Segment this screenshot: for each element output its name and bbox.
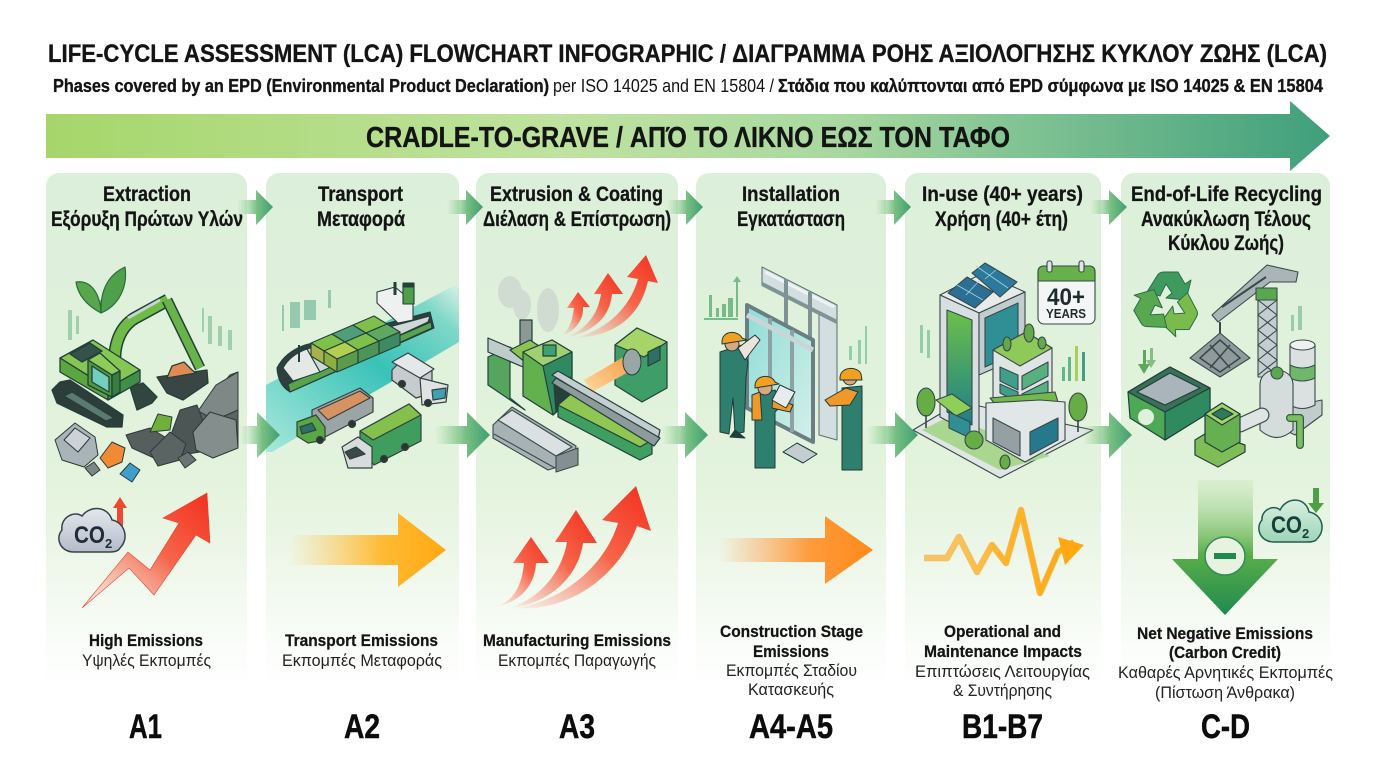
chart: A3 manufacturing emissions arrows — [498, 486, 651, 608]
lower flow arrow 5 — [1083, 412, 1132, 458]
cargo ship — [277, 282, 434, 392]
conveyor — [552, 371, 660, 460]
heading: transport: Μεταφορά — [317, 208, 405, 231]
storage cylinder — [1275, 340, 1322, 435]
label: A4-A5 emissions: Construction Stage — [720, 622, 863, 641]
ground — [913, 402, 1093, 478]
heading: in-use — [922, 183, 1083, 231]
upper flow arrow 5 — [1090, 190, 1127, 225]
label: B1-B7 impacts: Operational and — [944, 622, 1061, 641]
mid block — [993, 332, 1052, 420]
label: B1-B7 impacts: & Συντήρησης — [953, 681, 1052, 700]
icon: CO2 cloud down — [1259, 488, 1324, 542]
heading: extraction: Εξόρυξη Πρώτων Υλών — [51, 208, 243, 231]
subtitle: Phases covered by an EPD (Environmental Product Declaration) — [53, 76, 549, 96]
subtitle — [53, 76, 1323, 96]
heading: extrusion and coating: Διέλαση & Επίστρωση) — [483, 208, 671, 231]
label: A1 emissions — [82, 631, 211, 670]
icon: 40+ years calendar — [1038, 261, 1095, 324]
phase code C-D: C-D — [1201, 708, 1250, 746]
label: A4-A5 emissions: Κατασκευής — [748, 680, 834, 699]
heading: end-of-life recycling — [1131, 183, 1322, 255]
subtitle: per ISO 14025 and EN 15804 / — [553, 76, 774, 96]
scrap bin — [1128, 367, 1210, 440]
heading: end-of-life recycling: Ανακύκλωση Τέλους — [1141, 208, 1311, 231]
panel: C-D end of life background — [1121, 173, 1330, 690]
label: A2 emissions: Εκπομπές Μεταφοράς — [282, 651, 442, 670]
window frames — [747, 267, 837, 442]
label: A3 emissions — [483, 631, 671, 670]
subtitle: Στάδια που καλύπτονται από EPD σύμφωνα με ISO 14025 & EN 15804 — [778, 76, 1323, 96]
illustration: recycling plant — [1127, 265, 1322, 467]
label: A1 emissions: Υψηλές Εκπομπές — [82, 651, 211, 670]
heading: extraction — [51, 183, 243, 231]
illustration: extrusion line — [488, 255, 667, 472]
truck: gray box — [392, 353, 448, 406]
pipes — [1240, 415, 1300, 445]
phase code A2: A2 — [344, 708, 380, 746]
label: B1-B7 impacts — [915, 622, 1090, 700]
water — [266, 283, 459, 452]
icon: CO2 cloud up: 2 — [105, 536, 112, 551]
heading: extrusion and coating: Extrusion & Coating — [490, 183, 663, 206]
heading: in-use: In-use (40+ years) — [922, 183, 1083, 206]
label: B1-B7 impacts: Επιπτώσεις Λειτουργίας — [915, 662, 1090, 681]
heading: transport: Transport — [318, 183, 403, 206]
panel: A2 transport background — [266, 173, 459, 690]
label: A1 emissions: High Emissions — [89, 631, 203, 650]
illustration: green building — [913, 261, 1095, 478]
heading: installation — [737, 183, 845, 231]
panel: B1-B7 in-use background — [905, 173, 1101, 690]
heading: transport — [317, 183, 405, 231]
lower flow arrow 1 — [240, 412, 280, 458]
heading: in-use: Χρήση (40+ έτη) — [935, 208, 1068, 231]
excavator — [52, 300, 208, 427]
phase code A4-A5: A4-A5 — [749, 708, 833, 746]
small bar chart — [1062, 346, 1085, 381]
trees — [917, 388, 1087, 469]
rocks — [55, 372, 238, 482]
chart: A2 transport emissions arrow — [288, 513, 446, 587]
heading: end-of-life recycling: Κύκλου Ζωής) — [1168, 232, 1284, 255]
panel: A4-A5 installation background — [696, 173, 886, 690]
aluminium profiles — [493, 407, 578, 472]
label: C-D net negative: (Πίστωση Άνθρακα) — [1155, 683, 1295, 702]
data ticks — [68, 308, 232, 350]
icon: CO2 cloud up — [59, 497, 127, 552]
banner arrow: cradle-to-grave — [46, 101, 1330, 171]
machine — [488, 320, 667, 415]
lower flow arrow 3 — [662, 412, 708, 458]
phase code A1: A1 — [129, 708, 162, 746]
workers — [720, 332, 862, 470]
entrance canopy — [936, 394, 972, 416]
chart: C-D net negative arrow — [1172, 480, 1278, 615]
upper flow arrow 4 — [875, 190, 911, 225]
icon: leaves — [76, 267, 126, 313]
label: C-D net negative: Net Negative Emissions — [1137, 624, 1313, 643]
label: C-D net negative: (Carbon Credit) — [1169, 643, 1281, 662]
truck: green container — [342, 404, 421, 468]
label: A3 emissions: Manufacturing Emissions — [483, 631, 671, 650]
upper flow arrow 1 — [237, 190, 273, 225]
heading: extraction: Extraction — [103, 183, 191, 206]
chart: A1 high emissions arrow — [82, 493, 210, 608]
emission arrows small — [563, 255, 658, 338]
lower flow arrow 4 — [867, 412, 918, 458]
label: C-D net negative: Καθαρές Αρνητικές Εκπομπές — [1118, 663, 1333, 682]
label: A3 emissions: Εκπομπές Παραγωγής — [498, 651, 656, 670]
illustration: window installation — [704, 267, 867, 470]
panel: A1 extraction background — [46, 173, 247, 690]
heading: installation: Installation — [742, 183, 840, 206]
crane — [1190, 265, 1298, 377]
illustration: excavator and rocks — [52, 267, 238, 482]
label: B1-B7 impacts: Maintenance Impacts — [924, 642, 1082, 661]
chart — [704, 276, 741, 320]
solar panels — [948, 277, 993, 308]
icon: CO2 cloud down: 2 — [1302, 526, 1309, 541]
label: A4-A5 emissions — [720, 622, 863, 699]
lower flow arrow 2 — [435, 412, 490, 458]
label: A2 emissions: Transport Emissions — [285, 631, 438, 650]
upper flow arrow 3 — [667, 190, 703, 225]
icon: CO2 cloud up: CO — [74, 522, 105, 549]
icon: 40+ years calendar: 40+ — [1047, 284, 1085, 311]
tank — [1260, 367, 1293, 438]
shredder — [1195, 403, 1245, 467]
chart: A4-A5 construction emissions arrow — [719, 516, 873, 584]
label: A4-A5 emissions: Emissions — [753, 642, 829, 661]
illustration: ship and trucks — [266, 282, 459, 468]
data ticks — [282, 290, 331, 331]
tower — [940, 273, 1025, 313]
label: C-D net negative — [1118, 624, 1333, 702]
icon: recycling symbol — [1127, 272, 1205, 341]
heading: end-of-life recycling: End-of-Life Recycling — [1131, 183, 1322, 206]
label: A2 emissions — [282, 631, 442, 670]
phase code A3: A3 — [559, 708, 595, 746]
down arrows — [1138, 348, 1156, 374]
icon: CO2 cloud down: CO — [1271, 512, 1302, 539]
truck: ore load — [297, 388, 373, 444]
icon: 40+ years calendar: YEARS — [1046, 306, 1086, 321]
roof plants — [1003, 324, 1046, 351]
phase code B1-B7: B1-B7 — [962, 708, 1043, 746]
data ticks — [849, 326, 867, 364]
heading: installation: Εγκατάσταση — [737, 208, 845, 231]
lower block — [986, 400, 1065, 462]
smoke — [498, 276, 559, 332]
upper flow arrow 2 — [447, 190, 483, 225]
chart: B1-B7 operational impacts line — [924, 510, 1084, 593]
panel: A3 extrusion background — [476, 173, 678, 690]
heading: extrusion and coating — [483, 183, 671, 231]
label: A4-A5 emissions: Εκπομπές Σταδίου — [726, 661, 857, 680]
banner arrow: cradle-to-grave: CRADLE-TO-GRAVE / ΑΠΌ ΤΟ ΛΙΚΝΟ ΕΩΣ ΤΟΝ ΤΑΦΟ — [366, 122, 1010, 154]
